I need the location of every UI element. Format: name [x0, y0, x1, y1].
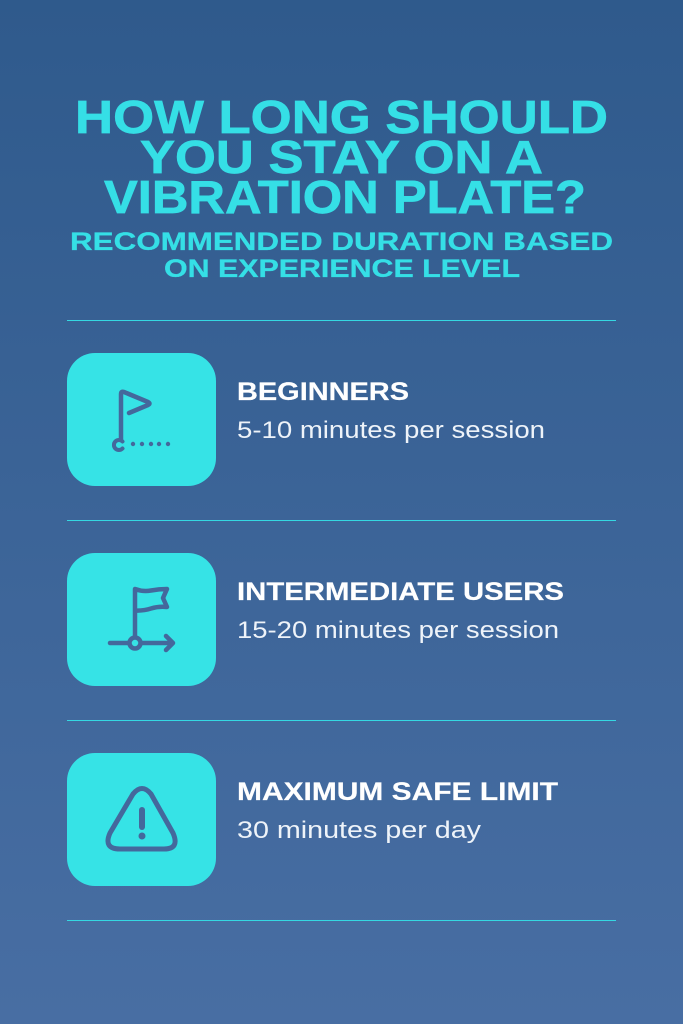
subtitle: RECOMMENDED DURATION BASED	[70, 228, 613, 256]
label: beginners: BEGINNERS	[237, 378, 409, 406]
subtitle	[70, 228, 613, 283]
panel: beginners	[67, 353, 545, 486]
title: VIBRATION PLATE?	[104, 171, 586, 223]
duration: maximum safe limit: 30 minutes per day	[237, 817, 481, 844]
label: maximum safe limit: MAXIMUM SAFE LIMIT	[237, 778, 558, 806]
title: HOW LONG SHOULD	[75, 91, 608, 143]
icon: flag with arrow	[67, 553, 216, 686]
panel: intermediate users	[67, 553, 564, 686]
subtitle: ON EXPERIENCE LEVEL	[164, 255, 520, 283]
panel: maximum safe limit	[67, 753, 558, 886]
icon: flag with dotted line	[67, 353, 216, 486]
icon: warning triangle	[67, 753, 216, 886]
title	[75, 91, 608, 223]
duration: intermediate users: 15-20 minutes per session	[237, 617, 559, 644]
duration: beginners: 5-10 minutes per session	[237, 417, 545, 444]
title: YOU STAY ON A	[140, 131, 543, 183]
label: intermediate users: INTERMEDIATE USERS	[237, 578, 564, 606]
